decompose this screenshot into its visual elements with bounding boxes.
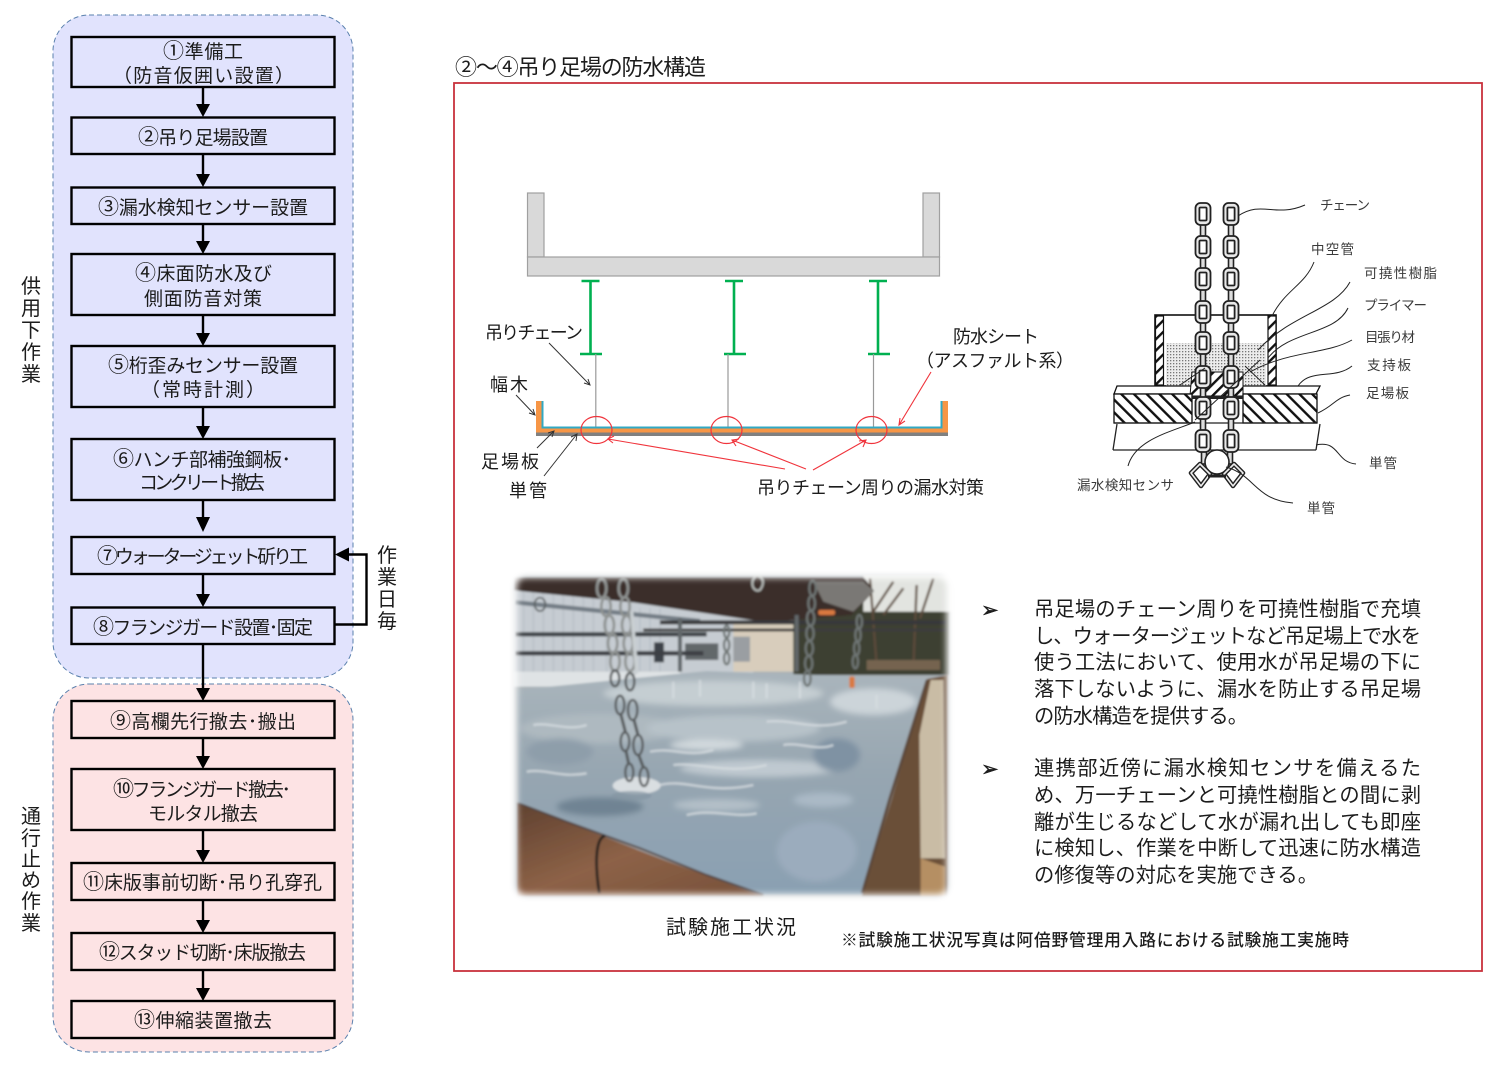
leak countermeasure circles <box>581 416 887 444</box>
detail labels: 可撓性樹脂 <box>1364 266 1437 281</box>
steel girders <box>580 281 890 354</box>
step 11 <box>72 863 334 900</box>
step 9: ⑨高欄先行撤去･搬出 <box>110 710 296 733</box>
diagram labels: 吊りチェーン周りの漏水対策 <box>757 478 984 498</box>
step 1: ①準備工 <box>163 40 243 63</box>
photo: test construction <box>500 565 960 905</box>
bullet text 2 <box>981 757 1421 887</box>
bullet text 1: 吊足場のチェーン周りを可撓性樹脂で充填 <box>1034 598 1421 621</box>
diagram labels: 防水シート <box>953 327 1039 347</box>
bullet text 1: ➢ <box>981 599 999 622</box>
orange hose detail <box>818 610 855 688</box>
diagram labels: 幅木 <box>490 375 528 395</box>
diagram labels: 単管 <box>509 481 547 501</box>
step 3 <box>72 188 334 224</box>
panel: work under road closure (pink) <box>53 684 353 1052</box>
step 3: ③漏水検知センサー設置 <box>98 196 308 219</box>
suspension chains <box>596 354 874 435</box>
step 1 <box>72 37 334 87</box>
detail labels: 支持板 <box>1367 358 1412 373</box>
step 5 <box>72 346 334 407</box>
step 10: モルタル撤去 <box>148 803 258 825</box>
left chain <box>1196 203 1210 464</box>
water streaks <box>527 680 877 815</box>
step 8: ⑧フランジガード設置･固定 <box>93 616 313 639</box>
step 7: ⑦ウォータージェット斫り工 <box>97 545 308 568</box>
step 2: ②吊り足場設置 <box>138 126 268 149</box>
bullet text 2: 離が生じるなどして水が漏れ出しても即座 <box>1034 811 1421 834</box>
detail labels <box>1077 198 1437 516</box>
step 5: （常時計測） <box>141 379 265 401</box>
panel: red frame <box>454 83 1482 971</box>
vertical label: 作業日毎: 作業日毎 <box>377 544 397 633</box>
photo background <box>500 565 960 905</box>
detail labels: プライマー <box>1364 298 1427 313</box>
bottom pipe and hooks <box>1191 450 1243 486</box>
detail labels: 足場板 <box>1366 386 1410 401</box>
leader curves <box>1128 205 1356 503</box>
step 12 <box>72 933 334 970</box>
bullet text 1 <box>981 598 1421 728</box>
photo caption: 試験施工状況 <box>666 916 796 939</box>
scaffold pipes <box>515 602 947 672</box>
water reflections <box>520 681 917 882</box>
bullet text 2: ➢ <box>981 758 999 781</box>
step 6: コンクリート撤去 <box>139 472 265 494</box>
diagram labels <box>481 323 1074 501</box>
step 7 <box>72 537 334 574</box>
bullet text 2: に検知し、作業を中断して迅速に防水構造 <box>1034 837 1421 860</box>
bullet text 1: の防水構造を提供する。 <box>1034 705 1248 728</box>
step 13 <box>72 1001 334 1038</box>
bullet text 2: め、万一チェーンと可撓性樹脂との間に剥 <box>1034 784 1421 807</box>
detail labels: 中空管 <box>1311 242 1354 257</box>
detail labels: チェーン <box>1320 198 1370 213</box>
diagram labels: 吊りチェーン <box>485 323 583 343</box>
step 4: ④床面防水及び <box>135 262 272 285</box>
step 4 <box>72 254 334 315</box>
pipe walls and resin <box>1155 315 1276 386</box>
support plate and sealing block <box>1114 372 1320 396</box>
detail labels: 目張り材 <box>1365 330 1415 345</box>
heading: waterproof structure: ②～④吊り足場の防水構造 <box>455 55 706 80</box>
cable <box>597 836 605 893</box>
single pipe lines <box>1113 423 1320 450</box>
diagram labels: 足場板 <box>481 452 539 472</box>
step 8 <box>72 608 334 644</box>
bullet text 1: し、ウォータージェットなど吊足場上で水を <box>1034 625 1421 648</box>
step 10: ⑩フランジガード撤去･ <box>113 778 291 801</box>
red leader arrows <box>608 372 931 470</box>
loop arrow: 作業日毎 <box>335 548 366 624</box>
step 6: ⑥ハンチ部補強鋼板･ <box>113 448 291 471</box>
detail labels: 単管 <box>1307 501 1335 516</box>
note: ※試験施工状況写真は阿倍野管理用入路における試験施工実施時 <box>841 931 1349 950</box>
vertical label: 通行止め作業: 通行止め作業 <box>21 805 41 935</box>
detail labels: 漏水検知センサ <box>1077 477 1174 493</box>
photo chains <box>535 575 862 786</box>
bullet text 2: の修復等の対応を実施できる。 <box>1034 864 1318 887</box>
vertical label: 供用下作業: 供用下作業 <box>21 275 41 386</box>
step 4: 側面防音対策 <box>144 288 262 310</box>
step 13: ⑬伸縮装置撤去 <box>134 1009 272 1032</box>
bridge deck <box>528 193 940 276</box>
water surface <box>517 671 927 895</box>
step 6 <box>72 439 334 500</box>
step 2 <box>72 118 334 154</box>
step 11: ⑪床版事前切断･吊り孔穿孔 <box>83 871 322 894</box>
overhead beam <box>513 577 874 622</box>
step 1: （防音仮囲い設置） <box>113 65 294 87</box>
panel: work under traffic (blue) <box>53 15 353 678</box>
scaffold tray <box>536 401 948 436</box>
step 9 <box>72 701 334 738</box>
black leader arrows <box>516 343 590 476</box>
step 10 <box>72 769 334 830</box>
right chain <box>1224 203 1238 464</box>
bullet text 2: 連携部近傍に漏水検知センサを備えるた <box>1034 757 1421 780</box>
scaffold board hatched <box>1114 394 1317 423</box>
wood box edges <box>517 675 948 897</box>
diagram: cross section of suspended scaffold <box>481 193 1074 501</box>
step 5: ⑤桁歪みセンサー設置 <box>108 354 298 377</box>
flow arrows <box>196 87 210 1001</box>
bullet text 1: 落下しないように、漏水を防止する吊足場 <box>1034 678 1421 701</box>
bullet text 1: 使う工法において、使用水が吊足場の下に <box>1034 651 1421 674</box>
chain anchor plate <box>612 777 661 800</box>
detail labels: 単管 <box>1369 456 1397 471</box>
step 12: ⑫スタッド切断･床版撤去 <box>99 941 306 964</box>
diagram: chain waterproof detail <box>1077 198 1437 516</box>
diagram labels: （アスファルト系） <box>916 351 1074 371</box>
